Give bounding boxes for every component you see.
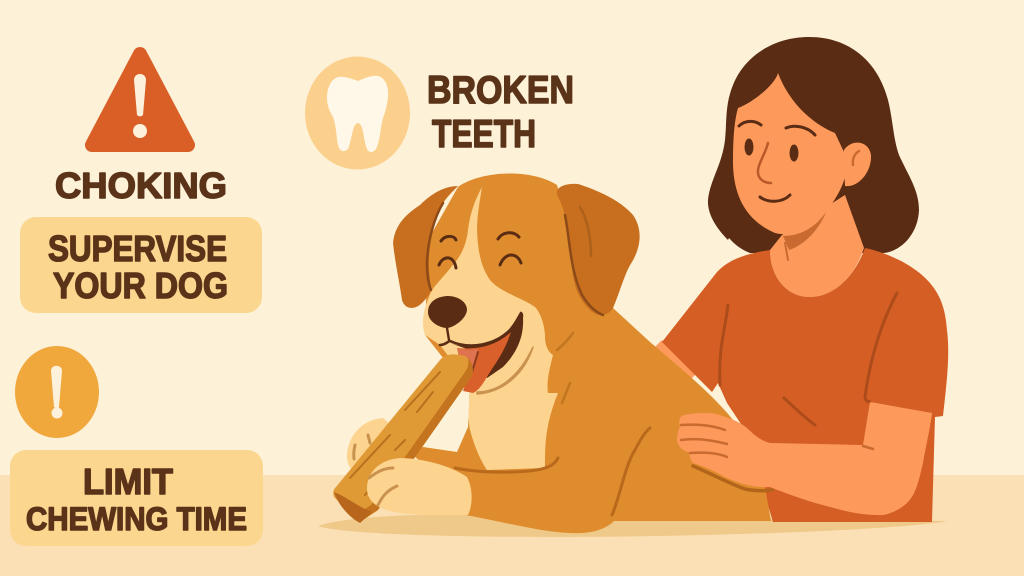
head xyxy=(425,174,613,392)
far arm xyxy=(654,340,695,380)
hand shadow xyxy=(693,466,772,491)
cream face and chest xyxy=(423,187,558,470)
face xyxy=(733,73,846,234)
tooth icon xyxy=(305,56,410,170)
nose xyxy=(428,296,467,328)
shirt xyxy=(662,248,948,522)
hair xyxy=(708,37,919,253)
exclamation circle icon xyxy=(15,346,99,438)
fur lines xyxy=(557,333,573,403)
panel: limit chewing time: CHEWING TIME xyxy=(26,501,247,537)
neck shadow xyxy=(783,212,826,250)
left paw xyxy=(347,418,395,475)
panel: limit chewing time: LIMIT xyxy=(83,461,173,502)
heading: broken teeth xyxy=(427,69,574,156)
right ear xyxy=(557,184,640,315)
ear detail xyxy=(853,151,859,165)
panel: limit chewing time xyxy=(10,450,263,546)
ear xyxy=(843,143,871,186)
right ear lines xyxy=(565,215,603,315)
warning triangle icon xyxy=(92,54,188,145)
panel: supervise your dog: SUPERVISE xyxy=(48,228,227,269)
woman xyxy=(654,37,948,522)
finger lines xyxy=(681,425,873,457)
left ear line xyxy=(427,203,443,290)
stick xyxy=(333,354,473,523)
right paw xyxy=(367,458,472,515)
heading: broken teeth: BROKEN xyxy=(427,69,574,112)
panel: supervise your dog xyxy=(20,217,262,313)
left ear xyxy=(393,186,458,308)
eyes and brows xyxy=(439,233,521,268)
paw lines xyxy=(354,435,397,505)
leg lines xyxy=(455,428,650,515)
right ear fold xyxy=(580,207,591,256)
dog body xyxy=(410,300,771,533)
mouth line xyxy=(440,313,521,345)
jaw line xyxy=(477,347,533,394)
heading: choking: CHOKING xyxy=(55,165,227,206)
floor xyxy=(0,475,1024,576)
nose xyxy=(758,143,771,183)
dog xyxy=(333,174,771,533)
eyes xyxy=(744,138,798,162)
woman's hand and arm xyxy=(677,402,932,515)
nose stem xyxy=(447,328,449,340)
smile xyxy=(760,195,790,201)
tongue groove xyxy=(472,352,478,372)
shirt folds xyxy=(720,293,897,425)
arm xyxy=(677,402,932,515)
tongue xyxy=(457,332,511,393)
floor shadow xyxy=(318,515,948,537)
neck crease xyxy=(785,243,788,260)
eyebrows xyxy=(739,121,815,135)
panel: supervise your dog: YOUR DOG xyxy=(53,265,228,306)
neck xyxy=(770,195,864,297)
heading: broken teeth: TEETH xyxy=(432,113,536,156)
mouth xyxy=(450,313,523,378)
tongue left side xyxy=(457,348,478,378)
